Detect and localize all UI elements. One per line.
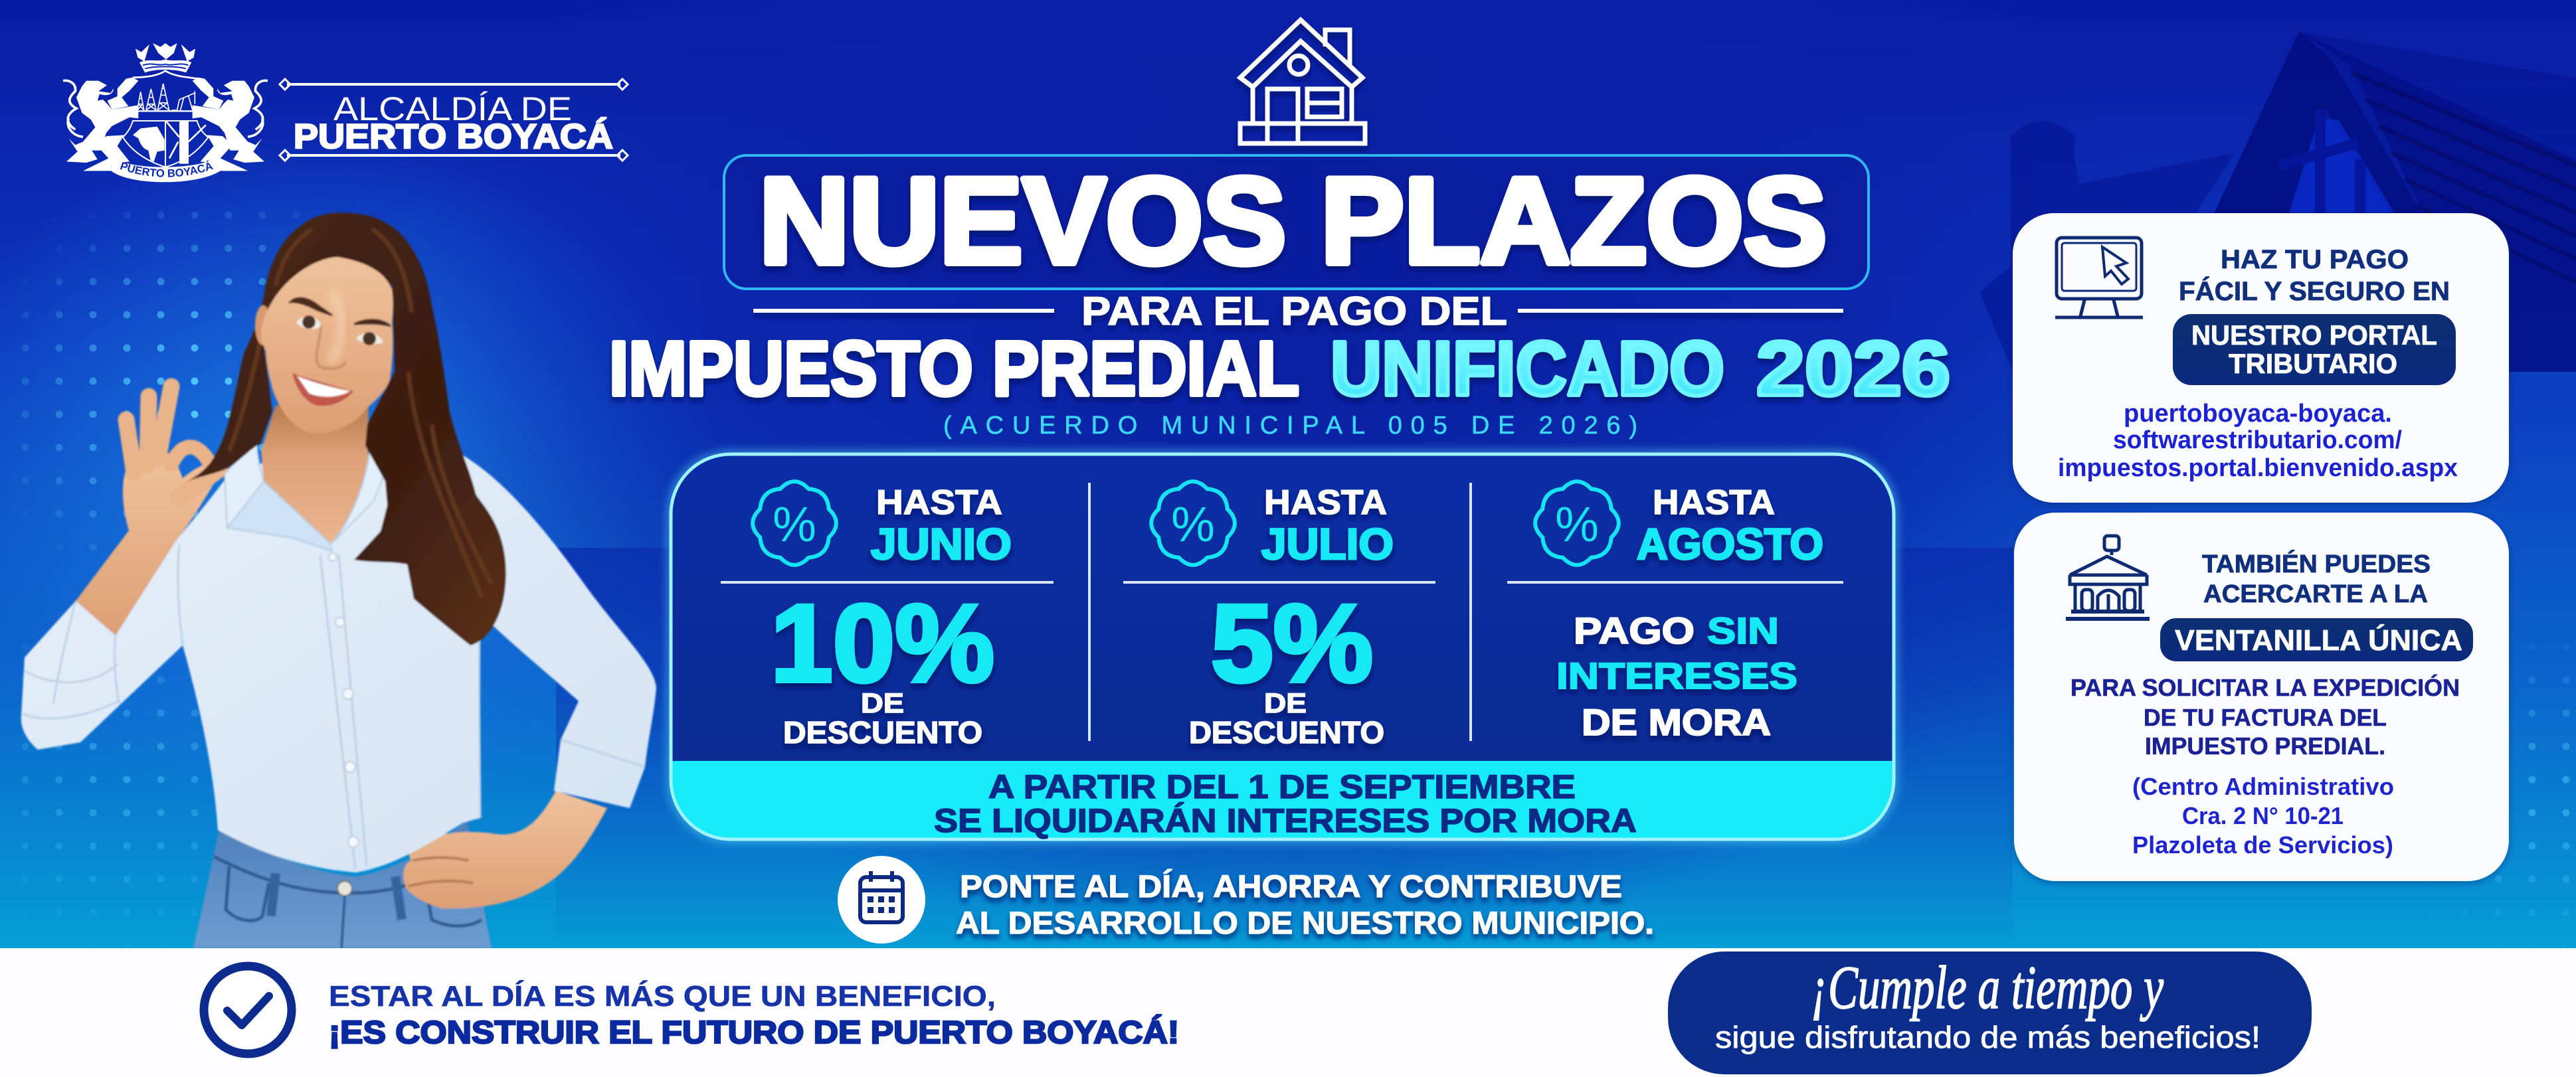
footer message: ¡ES CONSTRUIR EL FUTURO DE PUERTO BOYACÁ!: [329, 1015, 1179, 1050]
address: Cra. 2 N° 10-21: [2182, 802, 2344, 829]
wordmark line 1: ALCALDÍA DE: [333, 90, 572, 127]
column: agosto: AGOSTO: [1637, 519, 1823, 568]
column: agosto: SIN: [1707, 610, 1779, 651]
badge percent: [753, 481, 836, 565]
column: agosto: PAGO: [1574, 610, 1695, 651]
cyan band text: SE LIQUIDARÁN INTERESES POR MORA: [934, 802, 1637, 839]
hand on hip: [403, 791, 607, 908]
column: julio: DE: [1264, 687, 1307, 718]
card: ventanilla unica: [2014, 513, 2509, 881]
shirt buttons: [329, 553, 359, 847]
address: [2132, 773, 2394, 859]
crest left lion: [63, 78, 138, 163]
badge percent: [1151, 481, 1235, 565]
background: [0, 119, 2576, 948]
jeans: [193, 820, 492, 948]
label pill: [2173, 314, 2456, 385]
badge percent: %: [1171, 497, 1215, 552]
heading: impuesto predial unificado 2026: 2026: [1756, 325, 1950, 412]
crest banner: PUERTO BOYACÁ: [120, 160, 213, 177]
portal address: impuestos.portal.bienvenido.aspx: [2058, 454, 2458, 482]
column: junio: JUNIO: [871, 519, 1012, 568]
card heading: [2179, 245, 2450, 306]
call to action text: AL DESARROLLO DE NUESTRO MUNICIPIO.: [956, 905, 1654, 940]
column: agosto: [1507, 481, 1843, 743]
house icon: [1240, 20, 1365, 143]
card body: DE TU FACTURA DEL: [2144, 704, 2387, 731]
logo: wordmark: [280, 79, 628, 161]
crest crown: [133, 43, 198, 78]
callout: cumple a tiempo: ¡Cumple a tiempo y: [1811, 953, 2163, 1021]
crest shield: [123, 121, 208, 167]
title: nuevos plazos: NUEVOS PLAZOS: [759, 152, 1827, 289]
portal address: softwarestributario.com/: [2113, 426, 2402, 454]
crest oil derricks: [133, 84, 197, 111]
column: agosto: DE MORA: [1582, 701, 1771, 743]
card body: IMPUESTO PREDIAL.: [2145, 732, 2385, 760]
heading: impuesto predial unificado 2026: IMPUESTO PREDIAL: [609, 325, 1299, 412]
crest right lion: [193, 78, 268, 163]
label pill: VENTANILLA ÚNICA: [2175, 623, 2462, 657]
label pill: NUESTRO PORTAL: [2191, 319, 2437, 351]
footer message: ESTAR AL DÍA ES MÁS QUE UN BENEFICIO,: [329, 979, 996, 1013]
icon: monitor: [2055, 238, 2143, 317]
column: julio: [1123, 481, 1435, 750]
cyan band text: [934, 768, 1637, 839]
card heading: ACERCARTE A LA: [2203, 580, 2428, 608]
portal address: puertoboyaca-boyaca.: [2124, 400, 2392, 428]
card heading: HAZ TU PAGO: [2221, 245, 2409, 274]
badge percent: %: [773, 497, 816, 552]
panel: discounts: [671, 454, 1894, 839]
callout: cumple a tiempo: [1668, 952, 2312, 1074]
title box: [724, 152, 1869, 289]
column: julio: 5%: [1211, 582, 1373, 705]
hair highlights: [229, 229, 492, 598]
column: junio: DE: [861, 687, 904, 718]
call to action text: [956, 869, 1654, 940]
column: junio: [721, 481, 1054, 750]
ear: [255, 305, 271, 345]
column: junio: DESCUENTO: [783, 715, 982, 750]
subtitle: para el pago del: [753, 289, 1843, 333]
icon: check badge: [204, 966, 292, 1054]
card: portal tributario: [2013, 213, 2509, 503]
label pill: TRIBUTARIO: [2229, 348, 2397, 379]
card heading: FÁCIL Y SEGURO EN: [2179, 276, 2450, 306]
column: junio: HASTA: [876, 483, 1002, 522]
facial features: [290, 292, 391, 406]
footer band: [0, 948, 2576, 1077]
shirt: [21, 452, 656, 872]
heading: impuesto predial unificado 2026: [609, 325, 1950, 412]
column: agosto: HASTA: [1653, 483, 1775, 522]
badge percent: [1535, 481, 1619, 565]
column: julio: HASTA: [1264, 483, 1387, 522]
cyan band text: A PARTIR DEL 1 DE SEPTIEMBRE: [988, 768, 1576, 805]
subtitle: para el pago del: PARA EL PAGO DEL: [1081, 289, 1507, 333]
background house silhouette: [1979, 32, 2576, 372]
column: julio: JULIO: [1261, 519, 1394, 568]
legal note: (ACUERDO MUNICIPAL 005 DE 2026): [943, 412, 1637, 440]
shirt details: [23, 544, 645, 869]
logo: crest of Puerto Boyacá: [62, 43, 268, 182]
column: junio: 10%: [771, 582, 994, 705]
address: (Centro Administrativo: [2132, 773, 2394, 800]
icon: government building: [2066, 536, 2150, 619]
column: julio: DESCUENTO: [1189, 715, 1384, 750]
crest banner: [83, 135, 248, 182]
call to action text: PONTE AL DÍA, AHORRA Y CONTRIBUVE: [960, 869, 1622, 904]
callout: cumple a tiempo: sigue disfrutando de más beneficios!: [1715, 1020, 2260, 1054]
portal address: [2058, 400, 2458, 482]
badge percent: %: [1555, 497, 1599, 552]
woman photo illustration: [21, 212, 656, 948]
hair: [187, 212, 506, 645]
card heading: TAMBIÉN PUEDES: [2202, 549, 2431, 578]
wordmark line 2: PUERTO BOYACÁ: [294, 118, 613, 156]
address: Plazoleta de Servicios): [2132, 831, 2393, 859]
column: agosto: INTERESES: [1556, 655, 1797, 697]
card body: PARA SOLICITAR LA EXPEDICIÓN: [2070, 673, 2460, 701]
collar: [225, 439, 383, 551]
raised hand: [76, 386, 223, 635]
label pill: [2160, 618, 2473, 661]
footer message: [329, 979, 1179, 1050]
face: [261, 257, 393, 433]
card heading: [2202, 549, 2431, 608]
heading: impuesto predial unificado 2026: UNIFICADO: [1331, 325, 1724, 412]
icon: calendar: [838, 856, 925, 944]
neck: [261, 405, 374, 543]
card body: [2070, 673, 2460, 760]
